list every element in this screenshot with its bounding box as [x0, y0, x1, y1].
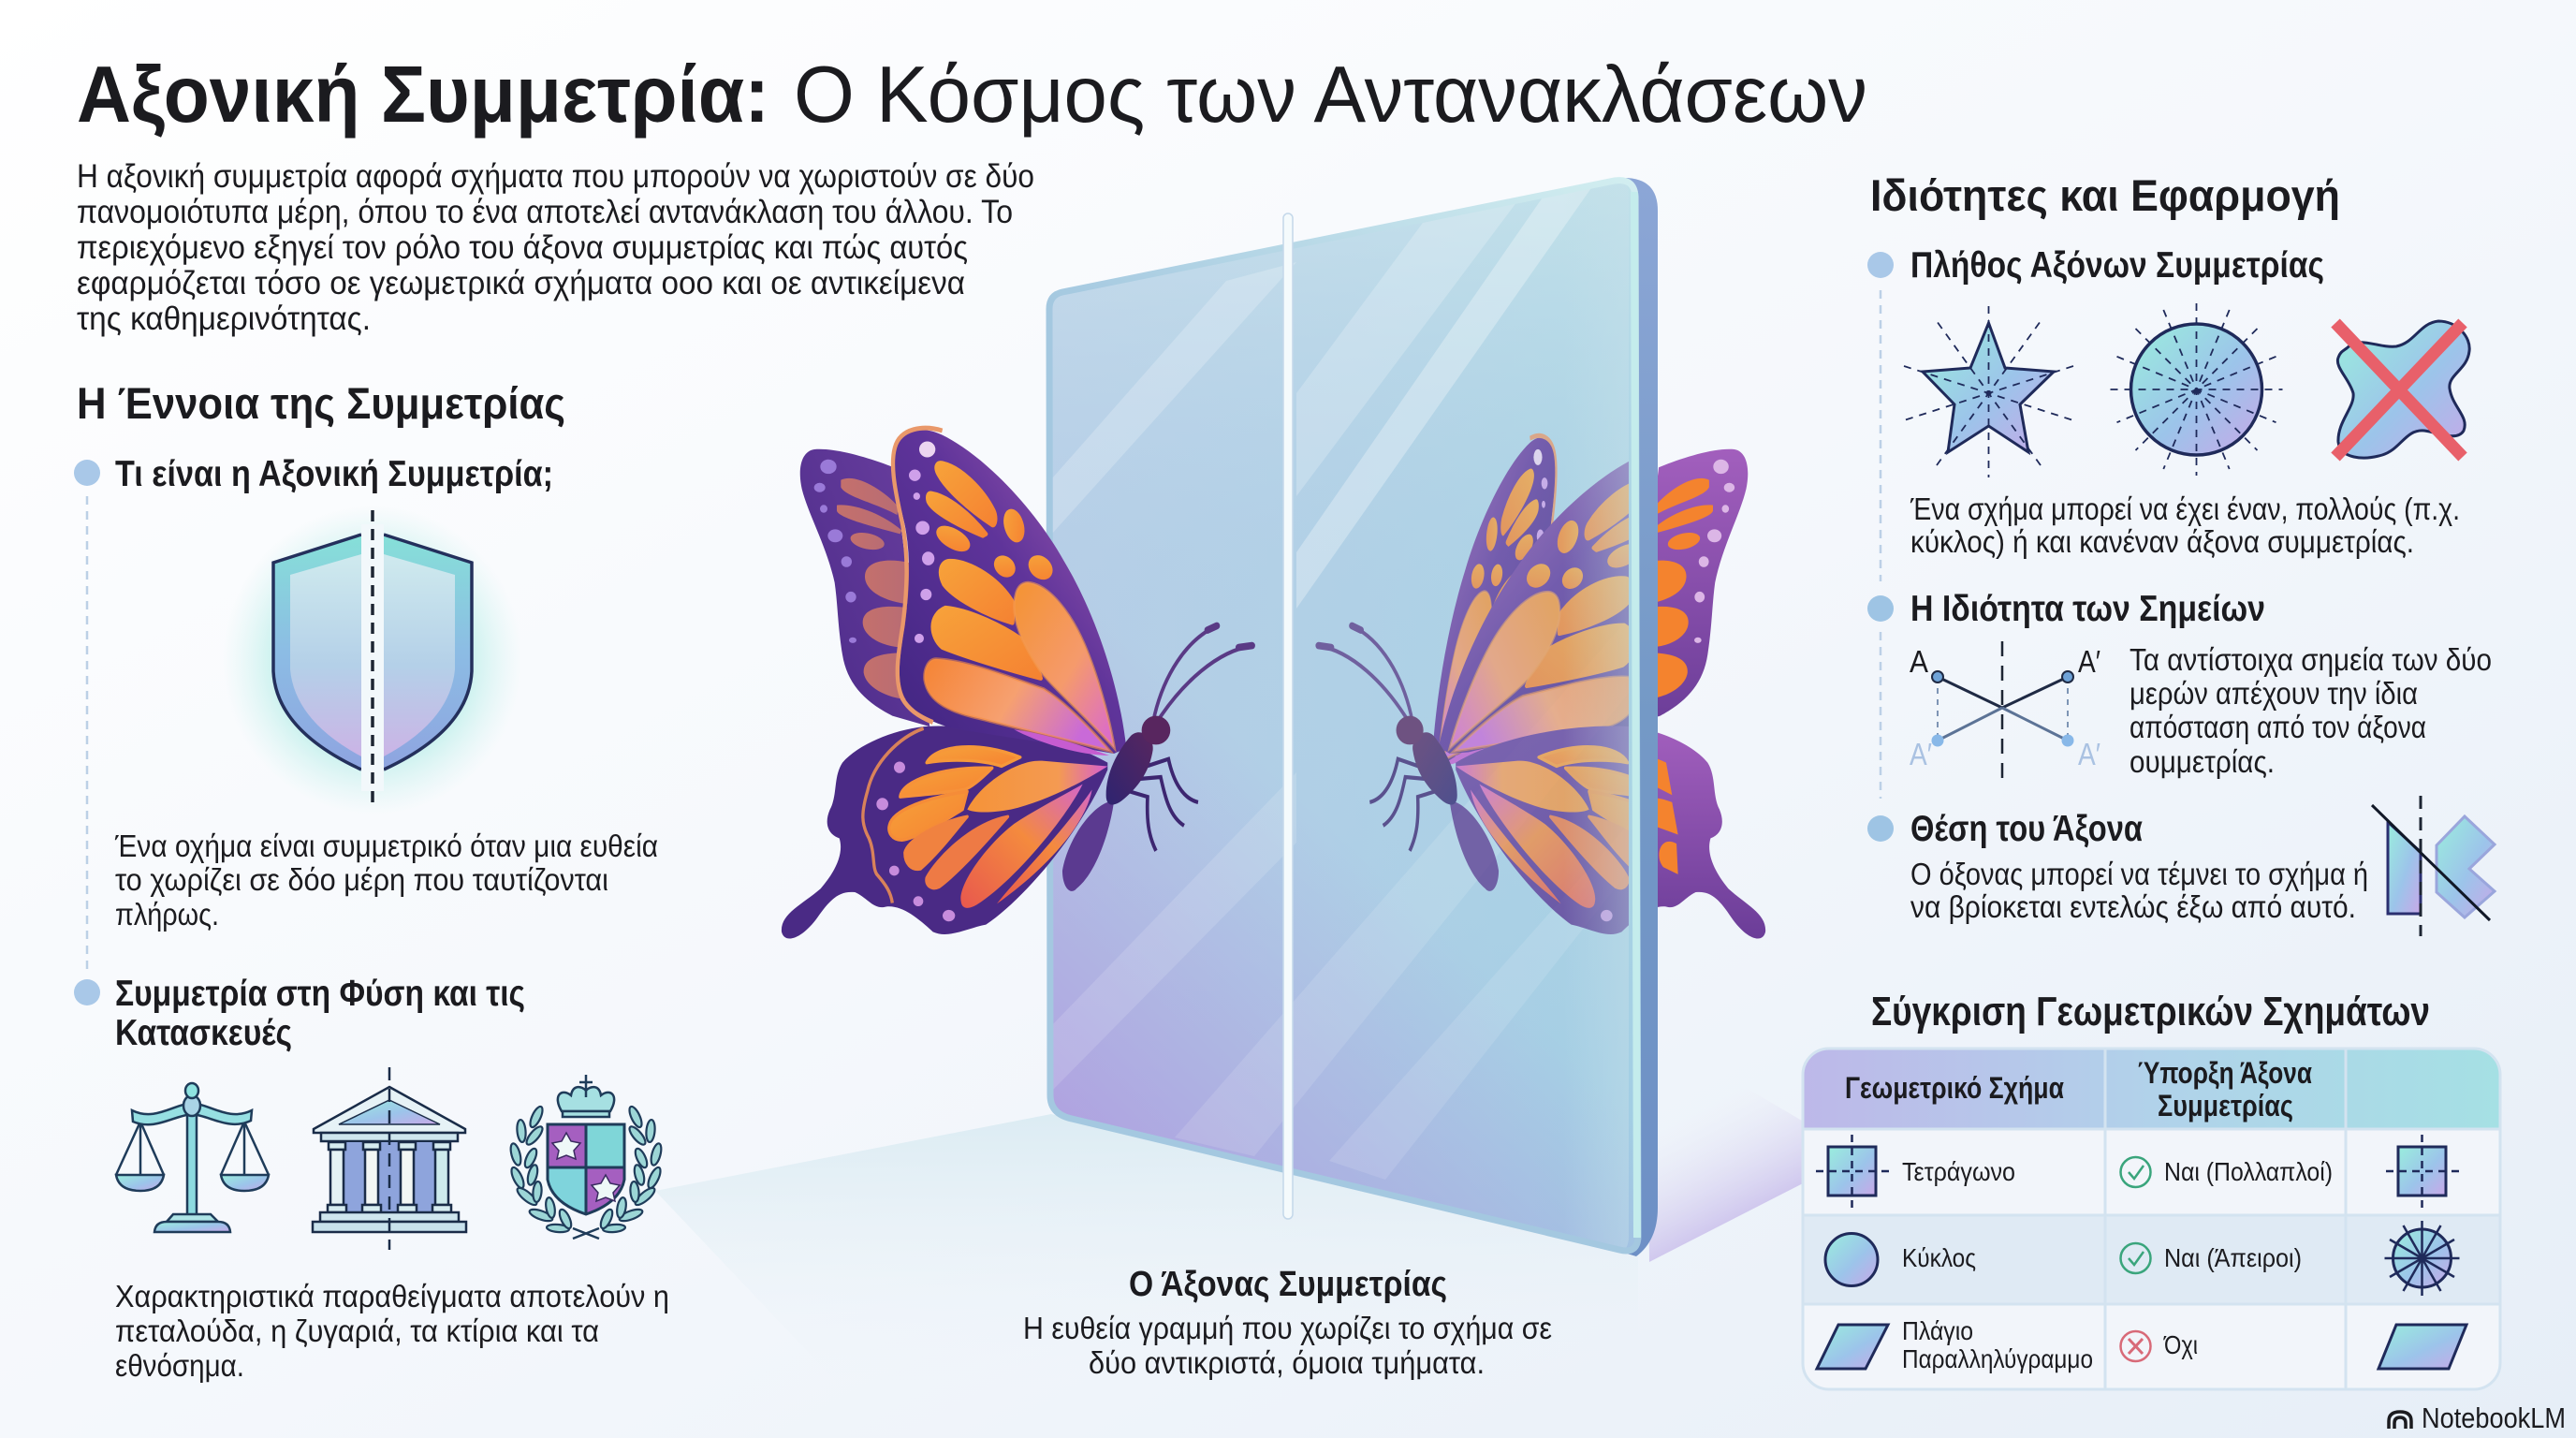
butterfly: [782, 428, 1252, 939]
text: definition: το χωρίζει σε δόο μέρη που ταυτίζονται: [115, 862, 608, 897]
panel: concept of symmetry: [74, 378, 669, 1383]
table header: Συμμετρίας: [2158, 1089, 2293, 1123]
text: definition: [114, 829, 658, 932]
icon: crossed-out asymmetric shape: [2335, 321, 2469, 458]
diagram: mirrored points: [1910, 641, 2100, 780]
row: square: Τετράγωνο: [1902, 1157, 2015, 1186]
row: parallelogram: Πλάγιο: [1902, 1316, 1973, 1345]
text: number of axes: κύκλος) ή και κανέναν άξονα συμμετρίας.: [1910, 524, 2414, 559]
diagram: mirrored points: A′: [2078, 644, 2100, 679]
bullet: symmetry in nature and constructions: Συμμετρία στη Φύση και τις: [115, 974, 525, 1014]
caption: axis of symmetry: [1023, 1265, 1552, 1380]
table header: Ύπορξη Άξονα: [2137, 1056, 2312, 1090]
intro text: Η αξονική συμμετρία αφορά σχήματα που μπορούν να χωριστούν σε δύο: [77, 158, 1034, 195]
text: property of points: απόσταση από τον άξονα: [2130, 710, 2426, 744]
intro text: πανομοιότυπα μέρη, όπου το ένα αποτελεί αντανάκλαση του άλλου. Το: [77, 194, 1013, 230]
text: examples: Χαρακτηριστικά παραθείγματα αποτελούν η: [115, 1279, 669, 1313]
intro text: της καθημερινότητας.: [77, 301, 371, 337]
text: examples: [115, 1279, 669, 1383]
icon: axis position shapes: [2372, 796, 2495, 936]
table: comparison of shapes: [1803, 1049, 2500, 1389]
title: Αξονική Συμμετρία:: [77, 51, 769, 139]
icon: symmetric shield: [223, 506, 522, 814]
table header: Γεωμετρικό Σχήμα: [1845, 1071, 2064, 1105]
mirror outline: [1049, 181, 1638, 1251]
bullet: axis position: Θέση του Άξονα: [1910, 809, 2143, 849]
icon: star with axes: [1904, 306, 2073, 477]
butterfly reflection in mirror: [1318, 169, 1765, 1264]
bullet: symmetry in nature and constructions: [74, 974, 525, 1053]
table header: [1845, 1056, 2312, 1123]
panel: properties and application: [1867, 170, 2495, 936]
text: number of axes: [1910, 492, 2460, 559]
bullet: what is axial symmetry: Τι είναι η Αξονική Συμμετρία;: [115, 454, 553, 494]
text: property of points: ουμμετρίας.: [2130, 744, 2275, 779]
caption: axis of symmetry: δύο αντικριστά, όμοια τμήματα.: [1089, 1345, 1485, 1380]
row: square: Ναι (Πολλαπλοί): [2164, 1157, 2333, 1186]
row: circle: [1825, 1221, 2460, 1296]
icon: national emblem: [509, 1075, 663, 1239]
text: definition: πλήρως.: [115, 897, 219, 932]
text: number of axes: Ένα σχήμα μπορεί να έχει έναν, πολλούς (π.χ.: [1910, 492, 2460, 526]
row: parallelogram: [1817, 1316, 2466, 1373]
heading: properties: Ιδιότητες και Εφαρμογή: [1870, 170, 2340, 220]
bullet: number of axes: Πλήθος Αξόνων Συμμετρίας: [1910, 245, 2324, 286]
floor light left: [655, 1114, 1638, 1438]
intro text: εφαρμόζεται τόσο οε γεωμετρικά σχήματα ooo και οε αντικείμενα: [77, 265, 965, 301]
text: property of points: Τα αντίστοιχα σημεία των δύο: [2130, 642, 2492, 677]
diagram: mirrored points: A′: [1910, 737, 1932, 771]
title: Ο Κόσμος των Αντανακλάσεων: [794, 51, 1867, 139]
text: definition: Ένα οχήμα είναι συμμετρικό όταν μια ευθεία: [114, 829, 658, 863]
icon: balance scale: [116, 1083, 269, 1232]
text: axis position: να βρίοκεται εντελώς έξω από αυτό.: [1910, 889, 2356, 924]
icon: circle with many axes: [2110, 303, 2282, 476]
row: square: [1816, 1135, 2459, 1208]
text: examples: πεταλούδα, η ζυγαριά, τα κτίρια και τα: [115, 1313, 599, 1348]
row: circle: Κύκλος: [1902, 1243, 1976, 1272]
text: axis position: Ο όξονας μπορεί να τέμνει το σχήμα ή: [1910, 857, 2368, 891]
row: circle: Ναι (Άπειροι): [2164, 1243, 2302, 1272]
text: property of points: [2130, 642, 2492, 779]
bullet: symmetry in nature and constructions: Κατασκευές: [115, 1013, 292, 1053]
butterfly reflection outside mirror: [1456, 449, 1765, 939]
mirror side edge: [1624, 178, 1658, 1256]
illustration: mirror with butterfly: [655, 169, 1807, 1438]
diagram: mirrored points: A′: [2078, 737, 2100, 771]
caption: axis of symmetry: Η ευθεία γραμμή που χωρίζει το σχήμα σε: [1023, 1311, 1552, 1345]
heading: comparison table: Σύγκριση Γεωμετρικών Σχημάτων: [1871, 989, 2430, 1034]
caption: axis of symmetry: Ο Άξονας Συμμετρίας: [1129, 1265, 1447, 1304]
axis of symmetry line: [1283, 213, 1293, 1219]
text: property of points: μερών απέχουν την ίδια: [2130, 676, 2418, 711]
bullet: property of points: Η Ιδιότητα των Σημείων: [1910, 589, 2265, 629]
icon: greek temple: [313, 1067, 466, 1250]
heading: concept: Η Έννοια της Συμμετρίας: [77, 378, 565, 428]
row: parallelogram: Όχι: [2163, 1330, 2198, 1359]
diagram: mirrored points: A: [1910, 644, 1928, 679]
mirror glass: [1049, 181, 1638, 1251]
text: examples: εθνόσημα.: [115, 1348, 244, 1383]
title: [77, 51, 1867, 139]
row: parallelogram: Παραλληλύγραμμο: [1902, 1344, 2093, 1373]
text: axis position: [1910, 857, 2368, 924]
intro text: [77, 158, 1034, 337]
floor shadow right: [1647, 1030, 1807, 1262]
intro text: περιεχόμενο εξηγεί τον ρόλο του άξονα συμμετρίας και πώς αυτός: [77, 229, 968, 266]
